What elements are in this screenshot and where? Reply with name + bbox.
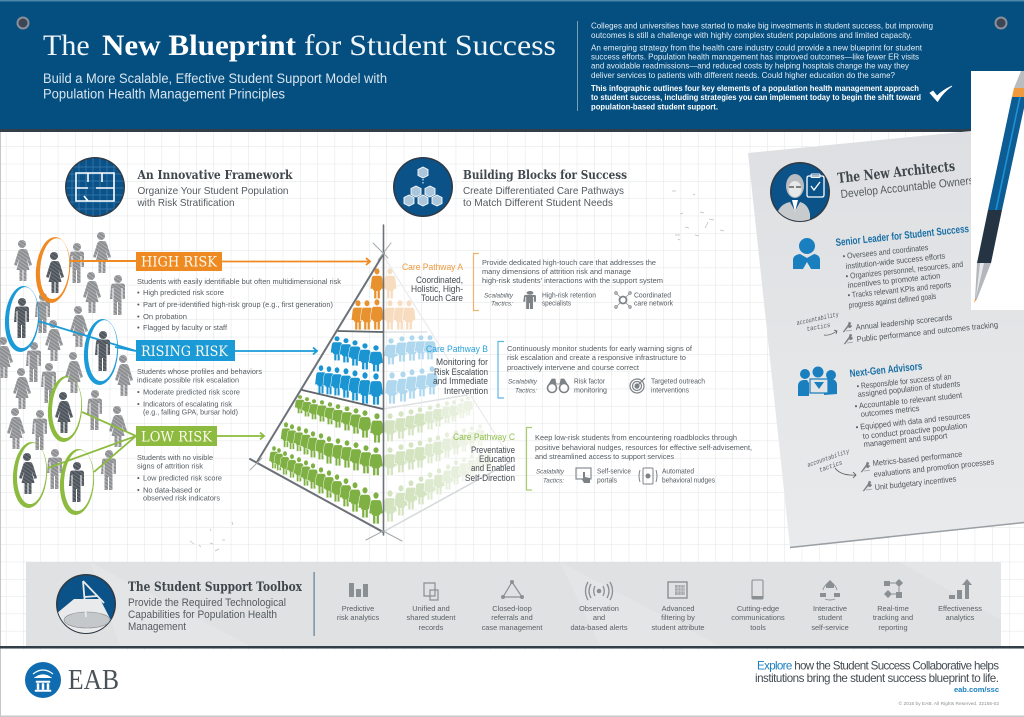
- intro text: This infographic outlines four key elements of a population health management approach: [591, 83, 919, 93]
- tool: self-service: student: [818, 613, 842, 622]
- tool: effectiveness analytics: Effectiveness: [938, 604, 982, 613]
- tool: predictive risk analytics: risk analytics: [337, 613, 379, 622]
- accountability tactics note 1: tactics: [806, 322, 831, 333]
- care pathway C text: positive behavioral nudges, resources for effective self-advisement,: [535, 443, 752, 452]
- intro text: deliver services to patients with different needs. Could higher education do the same?: [591, 70, 895, 80]
- toolbox heading: [128, 580, 302, 633]
- accountability tactics note 2: Unit budgetary incentives: [874, 474, 957, 492]
- toolbox heading: The Student Support Toolbox: [128, 580, 302, 595]
- tool: communications tools: tools: [750, 623, 766, 632]
- tool: observation alerts: and: [593, 613, 605, 622]
- low risk description: Low predicted risk score: [143, 474, 222, 482]
- architects heading: The New Architects: [837, 159, 956, 187]
- small scuffs: [190, 191, 724, 551]
- tool: unified student records: shared student: [407, 613, 455, 622]
- title: bold part: New Blueprint: [102, 29, 296, 62]
- next-gen advisors text: outcomes metrics: [860, 404, 920, 419]
- orange tier faded people: [383, 268, 416, 330]
- rising risk label: RISING RISK: [141, 344, 228, 360]
- low risk description: •: [137, 486, 140, 494]
- high risk description: •: [137, 288, 140, 297]
- white corner behind pen: [971, 71, 1024, 310]
- care pathway B label: [426, 343, 488, 396]
- care pathway C label: Self-Direction: [465, 473, 515, 483]
- senior leader text: Senior Leader for Student Success: [835, 223, 970, 249]
- accountability tactics note 2: accountability: [806, 448, 851, 469]
- panel: student support toolbox: [26, 562, 1001, 646]
- low risk label: LOW RISK: [141, 430, 212, 446]
- care pathway B label: and Immediate: [433, 376, 488, 386]
- rising risk description: (e.g., falling GPA, bursar hold): [143, 408, 238, 416]
- tool: predictive risk analytics: [337, 583, 379, 622]
- senior leader text: incentives to promote action: [847, 271, 941, 290]
- intro text: and avoidable readmissions—and reduced costs by helping hospitals change the way they: [591, 60, 910, 70]
- care pathway A text: Coordinated: [634, 292, 671, 300]
- title: The: [43, 29, 90, 62]
- next-gen advisors text: assigned population of students: [857, 379, 961, 399]
- footer call to action: eab.com/ssc: [954, 685, 999, 694]
- high risk description: Flagged by faculty or staff: [143, 323, 228, 332]
- intro text: success efforts. Population health management has improved outcomes—like fewer ER visits: [591, 52, 919, 62]
- care pathway B text: Targeted outreach: [651, 378, 705, 386]
- care pathway C label: Care Pathway C: [453, 431, 515, 442]
- rising risk highlighted students: [3, 285, 136, 386]
- accountability tactics note 2: [806, 448, 995, 492]
- low risk highlighted students: [11, 375, 136, 516]
- next-gen advisors text: Next-Gen Advisors: [849, 360, 923, 380]
- icon: automated nudges: [639, 468, 657, 484]
- care pathway C text: behavioral nudges: [662, 478, 716, 484]
- subtitle: [43, 71, 387, 102]
- tool: communications tools: communications: [731, 613, 785, 622]
- bracket A: [474, 254, 479, 310]
- tool: effectiveness analytics: [938, 579, 982, 622]
- footer logo: EAB: [68, 665, 119, 696]
- tool: advanced filtering: [651, 582, 705, 632]
- accountability tactics note 2: evaluations and promotion processes: [873, 457, 995, 479]
- care pathway B text: proactively intervene and course correct: [507, 363, 640, 372]
- low risk description: [137, 453, 222, 502]
- toolbox heading: Provide the Required Technological: [128, 597, 286, 609]
- tool: unified student records: records: [419, 623, 444, 632]
- care pathway B text: monitoring: [574, 388, 607, 394]
- care pathway C label: Education: [479, 454, 515, 464]
- arrow: high risk: [222, 258, 370, 265]
- accountability tactics note 1: accountability: [796, 311, 840, 327]
- senior leader text: • Organizes personnel, resources, and: [845, 260, 964, 281]
- senior leader text: [835, 223, 970, 310]
- care pathway B text: risk escalation and create a responsive infrastructure to: [507, 353, 686, 362]
- next-gen advisors text: [849, 360, 971, 449]
- care pathway A text: [482, 258, 674, 308]
- tool: real-time reporting: Real-time: [877, 604, 909, 613]
- intro text: outcomes is still a challenge with highly complex student populations and limited capacity.: [591, 30, 912, 40]
- tool: observation alerts: data-based alerts: [570, 623, 628, 632]
- rising risk description: •: [137, 388, 140, 396]
- subtitle: Population Health Management Principles: [43, 86, 285, 102]
- tool: advanced filtering: filtering by: [661, 613, 695, 622]
- accountability tactics note 1: Annual leadership scorecards: [855, 313, 953, 332]
- care pathway A label: Care Pathway A: [402, 261, 464, 272]
- architects heading: Develop Accountable Owners: [840, 175, 975, 201]
- tool: advanced filtering: Advanced: [662, 604, 694, 613]
- care pathway B label: Risk Escalation: [434, 367, 488, 377]
- tool: closed-loop referrals: Closed-loop: [492, 604, 532, 613]
- low risk description: No data-based or: [143, 486, 201, 494]
- tool: self-service: Interactive: [813, 604, 847, 613]
- rising risk description: •: [137, 400, 140, 408]
- low risk description: Students with no visible: [137, 453, 213, 462]
- care pathway C text: [535, 433, 752, 484]
- next-gen advisors text: • Responsible for success of an: [856, 372, 952, 391]
- care pathway A text: Provide dedicated high-touch care that addresses the: [482, 258, 656, 267]
- tool: self-service: [811, 580, 849, 632]
- blue tier people: [315, 336, 383, 405]
- tool: closed-loop referrals: case management: [482, 623, 542, 632]
- tool: communications tools: [731, 580, 785, 632]
- care pathway B label: Care Pathway B: [426, 343, 488, 354]
- toolbox heading: Management: [128, 621, 186, 633]
- footer call to action: Explore how the Student Success Collaborative helps: [757, 660, 999, 672]
- intro text: An emerging strategy from the health care industry could provide a new blueprint for student: [591, 42, 923, 52]
- bracket B: [498, 342, 504, 398]
- bracket C: [526, 428, 532, 490]
- blue tier faded people: [384, 335, 439, 404]
- accountability tactics note 1: Public performance and outcomes tracking: [856, 320, 998, 344]
- arrow: rising risk: [235, 348, 317, 354]
- next-gen advisors text: to conduct proactive population: [862, 421, 968, 441]
- section heading: framework icon: [65, 157, 125, 217]
- senior leader text: institution-wide success efforts: [845, 252, 946, 271]
- accountability tactics note 2: tactics: [818, 459, 843, 474]
- section heading: building blocks text: Building Blocks for Success: [463, 167, 627, 182]
- care pathway A text: High-risk retention: [542, 292, 596, 300]
- rising risk description: Moderate predicted risk score: [143, 388, 240, 396]
- footer call to action: © 2016 by EAB. All Rights Reserved. 32155-02: [899, 700, 999, 707]
- care pathway A label: Holistic, High-: [411, 284, 463, 294]
- care pathway A text: Scalability: [484, 292, 514, 300]
- intro text: to student success, including strategies you can implement today to begin the shift toward: [591, 92, 921, 102]
- arrow: low risk: [217, 432, 264, 440]
- intro text: [577, 20, 933, 112]
- icon: retention specialist: [523, 291, 536, 309]
- section heading: building blocks text: [463, 167, 627, 209]
- care pathway B text: Continuously monitor students for early warning signs of: [507, 344, 693, 353]
- next-gen advisors text: • Equipped with data and resources: [855, 411, 971, 432]
- tool: effectiveness analytics: analytics: [946, 613, 975, 622]
- toolbox heading: Capabilities for Population Health: [128, 609, 277, 621]
- icon: compass: [56, 574, 118, 634]
- icon: pen: [974, 71, 1024, 303]
- rising risk description: Indicators of escalating risk: [143, 400, 232, 408]
- subtitle: Build a More Scalable, Effective Student Support Model with: [43, 71, 387, 86]
- tool: unified student records: Unified and: [412, 604, 450, 613]
- care pathway C text: Keep low-risk students from encountering roadblocks through: [535, 433, 737, 442]
- care pathway A text: care network: [634, 300, 674, 308]
- high risk description: On probation: [143, 312, 187, 321]
- high risk description: [137, 277, 341, 332]
- tool: closed-loop referrals: [482, 580, 542, 632]
- care pathway B label: Intervention: [444, 386, 488, 396]
- green tier faded people: [383, 396, 494, 522]
- high risk label: HIGH RISK: [141, 254, 218, 270]
- tool: real-time reporting: tracking and: [873, 613, 913, 622]
- section heading: building blocks text: Create Differentiated Care Pathways: [463, 186, 624, 197]
- next-gen advisors text: management and support: [863, 431, 948, 449]
- icon: self-service portal: [576, 468, 591, 483]
- icon: next-gen advisors: [798, 366, 837, 396]
- section heading: framework text: [137, 167, 293, 209]
- care pathway A text: high-risk students' interactions with the support system: [482, 276, 663, 285]
- tool: unified student records: [407, 583, 455, 632]
- tool: advanced filtering: student attribute: [651, 623, 705, 632]
- high risk description: •: [137, 312, 140, 321]
- high risk description: •: [137, 323, 140, 332]
- tool: real-time reporting: [873, 579, 913, 632]
- care pathway A label: Coordinated,: [416, 275, 463, 285]
- intro text: population-based student support.: [591, 102, 718, 112]
- care pathway C label: and Enabled: [471, 463, 515, 473]
- icon: target: [630, 378, 645, 393]
- care pathway C text: Automated: [662, 468, 694, 476]
- care pathway B label: Monitoring for: [436, 357, 488, 367]
- care pathway A text: many dimensions of attrition risk and manage: [482, 267, 631, 276]
- care pathway B text: interventions: [651, 388, 690, 394]
- pyramid chart: [250, 225, 512, 541]
- high risk description: •: [137, 300, 140, 309]
- tool: self-service: self-service: [811, 623, 849, 632]
- low risk description: observed risk indicators: [143, 494, 220, 502]
- senior leader text: progress against defined goals: [848, 292, 937, 310]
- icon: senior leader: [793, 238, 820, 269]
- section heading: framework text: Organize Your Student Population: [138, 186, 288, 197]
- footer call to action: [755, 660, 999, 707]
- footer call to action: institutions bring the student success blueprint to life.: [755, 672, 999, 685]
- architects heading: [837, 159, 975, 201]
- care pathway B text: [507, 344, 705, 394]
- care pathway C text: Self-service: [597, 468, 631, 476]
- section heading: framework text: An Innovative Framework: [137, 167, 293, 182]
- low risk description: signs of attrition risk: [137, 462, 203, 470]
- senior leader text: • Tracks relevant KPIs and reports: [847, 280, 952, 300]
- rising risk description: indicate possible risk escalation: [137, 376, 239, 384]
- high risk description: High predicted risk score: [143, 288, 224, 297]
- tool: observation alerts: Observation: [579, 604, 619, 613]
- next-gen advisors text: • Accountable to relevant student: [854, 391, 963, 411]
- rising risk description: [137, 367, 262, 416]
- section heading: framework text: with Risk Stratification: [137, 198, 234, 209]
- intro text: Colleges and universities have started to make big investments in student success, but improving: [591, 20, 933, 30]
- care pathway B text: Risk factor: [574, 378, 606, 386]
- care pathway B text: Tactics:: [515, 388, 537, 394]
- high risk description: Part of pre-identified high-risk group (e.g., first generation): [143, 300, 333, 309]
- tool: closed-loop referrals: referrals and: [491, 613, 533, 622]
- tool: communications tools: Cutting-edge: [737, 604, 779, 613]
- accountability tactics note 1: [796, 311, 998, 344]
- footer logo: [25, 662, 119, 698]
- panel: the new architects: [748, 131, 1024, 548]
- tool: predictive risk analytics: Predictive: [342, 604, 374, 613]
- header banner: [0, 0, 1024, 132]
- icon: binoculars: [548, 379, 568, 392]
- rising risk description: Students whose profiles and behaviors: [137, 367, 262, 376]
- student crowd: [0, 232, 133, 490]
- tool: observation alerts: [570, 582, 628, 632]
- high risk highlighted student: [33, 236, 136, 304]
- care pathway C text: and streamlined access to support services: [535, 452, 674, 461]
- care pathway A label: [402, 261, 464, 303]
- orange tier people: [351, 268, 384, 330]
- senior leader text: • Oversees and coordinates: [842, 243, 929, 261]
- care pathway C text: Tactics:: [543, 478, 564, 484]
- icon: care network: [615, 292, 631, 308]
- care pathway C label: [453, 431, 515, 483]
- section heading: building blocks icon: [393, 157, 453, 217]
- section heading: building blocks text: to Match Different Student Needs: [463, 198, 613, 209]
- icon: architect: [770, 162, 830, 224]
- icon: check mark: [930, 86, 952, 102]
- high risk description: Students with easily identifiable but often multidimensional risk: [137, 277, 341, 286]
- footer rule: [0, 646, 1024, 648]
- green tier people: [269, 395, 384, 524]
- tool: real-time reporting: reporting: [878, 623, 908, 632]
- low risk description: •: [137, 474, 140, 482]
- care pathway B text: Scalability: [508, 378, 538, 386]
- care pathway A text: Tactics:: [491, 300, 513, 308]
- care pathway C label: Preventative: [471, 445, 515, 455]
- care pathway A label: Touch Care: [421, 293, 463, 303]
- accountability tactics note 2: Metrics-based performance: [872, 450, 963, 468]
- care pathway C text: Scalability: [536, 468, 565, 476]
- care pathway A text: specialists: [542, 300, 571, 308]
- care pathway C text: portals: [597, 478, 618, 484]
- title: end part: for Student Success: [304, 29, 556, 62]
